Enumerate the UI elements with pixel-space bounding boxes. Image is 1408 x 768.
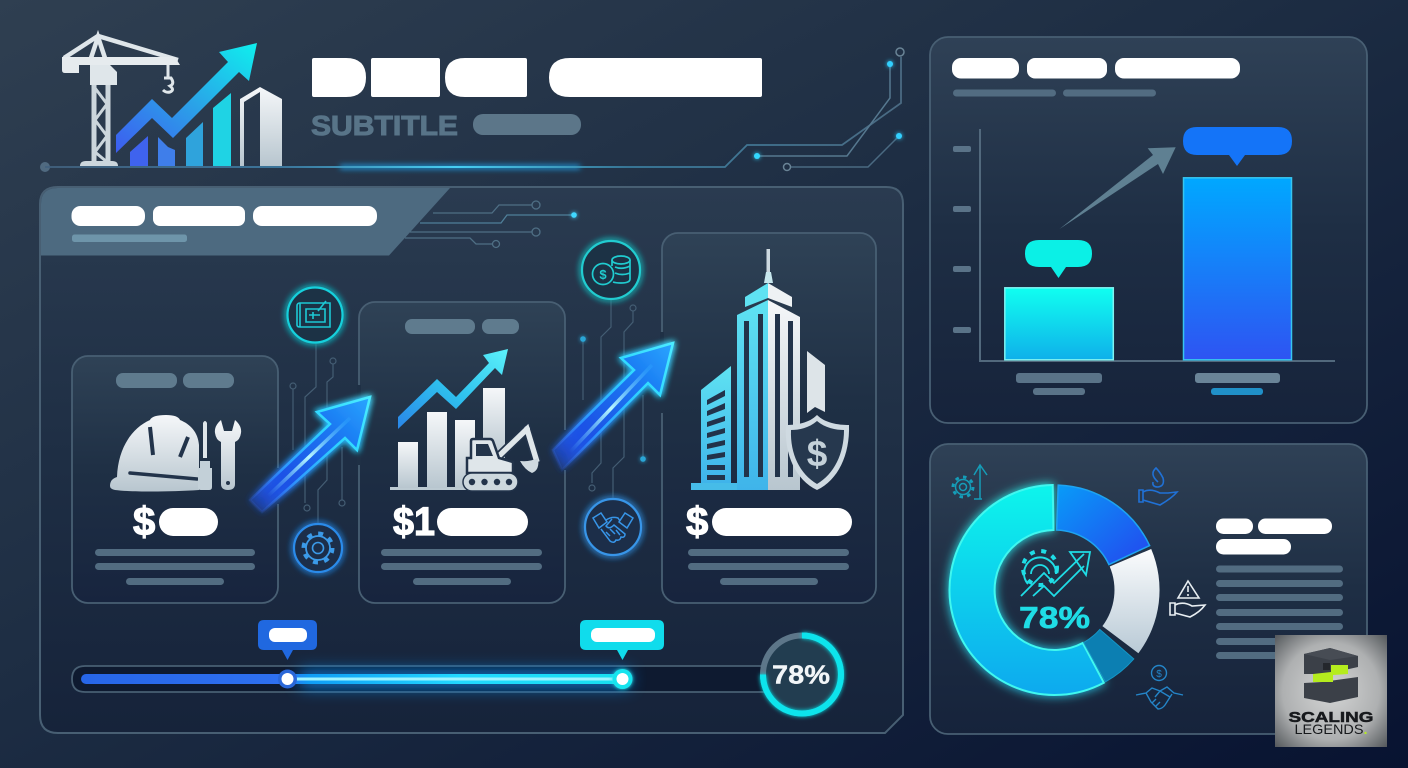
donut chart — [950, 485, 1160, 695]
bar small callout — [1025, 240, 1092, 278]
arrow 1 — [250, 397, 370, 512]
connector circuits — [290, 300, 646, 524]
bar large callout — [1183, 127, 1292, 166]
icon: coins — [582, 241, 640, 299]
icon: hard hat and tools — [110, 415, 241, 492]
segment white — [1102, 549, 1160, 653]
card 1 value: $ — [133, 500, 155, 544]
card border gaps behind arrows — [276, 332, 664, 504]
card 2 frame — [359, 302, 565, 603]
arrow 1 body — [250, 397, 370, 512]
panel heading pills — [952, 58, 1240, 78]
arrow 2 core streak — [570, 365, 652, 452]
segment blue — [1057, 485, 1150, 565]
segment dark blue — [1084, 629, 1134, 682]
card 1 pills — [116, 373, 234, 388]
icon: bars and excavator — [390, 349, 538, 491]
icon: hand with warning — [1170, 581, 1205, 617]
chart axes — [980, 129, 1335, 361]
logo: scaling legends — [1275, 635, 1387, 747]
icon: skyscraper with shield — [691, 249, 849, 490]
logo wordmark: SCALING — [1288, 709, 1374, 726]
slider fill — [81, 674, 622, 684]
bar small — [1005, 288, 1113, 360]
growth arrow — [116, 43, 257, 153]
subtitle word: SUBTITLE — [311, 110, 458, 141]
icon: gear with arrow — [953, 465, 987, 499]
slider marker 1 — [278, 670, 297, 688]
bar labels — [1016, 373, 1280, 395]
icon: skyscraper with shield: $ — [807, 433, 828, 474]
panel: bar chart — [930, 37, 1367, 423]
card 3 frame — [662, 233, 876, 603]
card 2 value — [393, 500, 528, 544]
subtitle — [311, 110, 581, 141]
slider track — [72, 666, 772, 692]
logo wordmark second line: LEGENDS. — [1294, 721, 1368, 737]
card 1 description — [95, 549, 255, 585]
icon: blueprint — [288, 288, 342, 342]
card 3 value — [686, 500, 852, 544]
donut value: 78% — [1019, 600, 1090, 635]
card 3 description — [688, 549, 849, 585]
logo mark — [1304, 648, 1358, 703]
donut centre icon — [1021, 551, 1090, 596]
panel frame — [40, 187, 903, 733]
card 2 pills — [405, 319, 519, 334]
text block heading — [1216, 518, 1332, 554]
card 1 — [72, 356, 278, 603]
axis ticks — [953, 146, 971, 333]
logo background — [1275, 635, 1387, 747]
icon: handshake with coin — [1136, 666, 1183, 709]
card 1 value — [133, 500, 218, 544]
panel: donut — [930, 444, 1367, 734]
card 2 description — [381, 549, 542, 585]
card 2 value: $1 — [393, 500, 435, 544]
panel frame — [930, 444, 1367, 734]
panel frame — [930, 37, 1367, 423]
arrow 1 core streak — [268, 418, 350, 496]
segment cyan — [950, 485, 1104, 695]
title — [312, 58, 762, 97]
card 3 — [662, 233, 876, 603]
progress ring 78% — [763, 636, 841, 714]
panel: main progression — [40, 187, 903, 733]
slider highlight — [295, 678, 620, 680]
arrow 2 body — [553, 343, 673, 470]
panel header pills — [72, 206, 377, 242]
card 3 value: $ — [686, 500, 708, 544]
progress slider — [72, 620, 841, 714]
panel header tab — [41, 188, 450, 256]
slider marker 2 — [612, 669, 632, 689]
crane — [62, 36, 180, 166]
slider glow — [300, 670, 630, 688]
text block lines — [1216, 566, 1343, 659]
icon: handshake — [585, 499, 641, 555]
header divider and circuit — [40, 48, 904, 172]
growth arrow — [1060, 147, 1176, 229]
bar large — [1184, 178, 1292, 360]
panel sub heading — [953, 90, 1156, 96]
progress ring 78%: 78% — [772, 660, 830, 690]
arrow 2 — [553, 343, 673, 470]
icon: gear — [294, 524, 342, 572]
icon: hand with drop — [1139, 468, 1177, 505]
slider callout 1 — [258, 620, 317, 660]
subtitle pill — [473, 114, 581, 135]
icon: handshake with coin: $ — [1156, 669, 1162, 680]
icon: crane and growth chart logo — [62, 36, 282, 166]
icon: coins: $ — [599, 267, 607, 282]
slider callout 2 — [580, 620, 664, 660]
card 2 — [359, 302, 565, 603]
panel header circuit — [405, 201, 577, 248]
chart bars — [130, 87, 282, 166]
card 1 frame — [72, 356, 278, 603]
